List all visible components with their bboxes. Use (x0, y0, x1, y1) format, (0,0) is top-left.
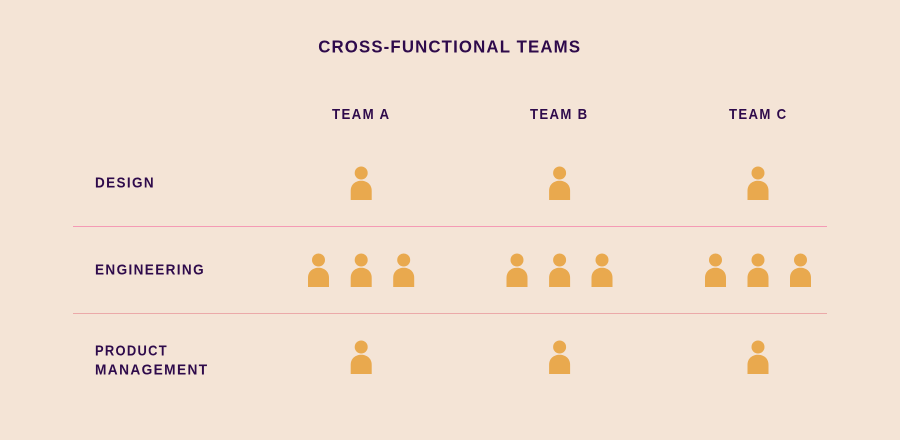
product management row people (351, 340, 768, 374)
row label: design: DESIGN (95, 176, 155, 192)
column headers: TEAM C (729, 107, 788, 123)
row label: engineering: ENGINEERING (95, 263, 205, 279)
engineering row people (308, 254, 811, 287)
row label: product management (95, 344, 208, 378)
column headers: TEAM B (530, 107, 588, 123)
column headers: TEAM A (332, 107, 390, 123)
row label: product management: PRODUCT (95, 344, 168, 360)
column headers (332, 107, 788, 123)
title: CROSS-FUNCTIONAL TEAMS (318, 36, 581, 56)
row label: product management: MANAGEMENT (95, 362, 208, 378)
design row people (351, 166, 768, 200)
